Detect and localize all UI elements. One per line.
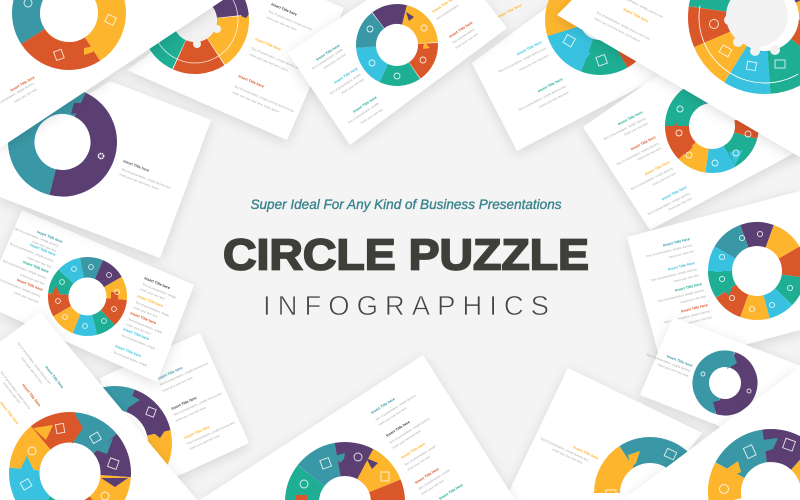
slide text: insert your own text — [454, 32, 478, 50]
slide text: Insert Title here — [681, 303, 708, 314]
slide text: Text of presentation, simple dummy text — [518, 84, 567, 112]
slide text: insert your own text here — [552, 447, 583, 465]
slide text: Insert Title here — [238, 74, 264, 89]
slide text: Text of presentation, simple — [142, 282, 177, 300]
slide text: Insert Title here — [623, 7, 649, 23]
slide text: Insert Title here — [184, 425, 210, 440]
slide text: Text of presentation, simple dummy — [630, 166, 674, 191]
slide text: Text of presentation, simple dummy — [603, 116, 647, 141]
panel: bottom two-part slide — [505, 368, 709, 500]
slide text: insert your own text here, lorem — [119, 172, 160, 191]
slide text: insert your own text here — [377, 406, 408, 427]
slide text: Insert Title here — [21, 383, 41, 407]
puzzle donut — [354, 2, 440, 88]
slide text: Insert Title here — [171, 396, 197, 411]
slide text: Text of presentation, simple dummy text — [251, 46, 301, 71]
slide text: insert your own text here — [657, 362, 689, 378]
slide text: Insert Title here — [385, 420, 411, 438]
slide text: insert your own text — [2, 381, 21, 404]
slide text: insert your own text — [680, 294, 706, 304]
title: CIRCLE PUZZLE: CIRCLE PUZZLE — [223, 230, 589, 280]
slide text: Insert Title here — [44, 365, 64, 389]
panel: top center slide — [472, 0, 720, 151]
slide text: Text of presentation, simple — [121, 333, 156, 351]
panel: right two-part slide — [640, 317, 800, 460]
slide text: Insert Title here — [370, 397, 396, 415]
slide text: insert your own text — [14, 290, 39, 304]
panel: top right large slide — [557, 0, 800, 157]
slide text: insert your own text — [126, 322, 151, 336]
puzzle donut — [549, 0, 651, 71]
slide text: Text of presentation, simple dummy — [14, 227, 60, 248]
slide text: Text of presentation, simple dummy text — [16, 341, 52, 385]
slide text: Insert Title here — [663, 237, 690, 248]
panel: top-left slide — [0, 0, 223, 148]
slide text: Insert Title here — [516, 40, 542, 56]
slide text: Text of presentation, simple dummy text — [173, 391, 223, 417]
panel: left purple donut slide — [0, 81, 211, 258]
slide text: Text of presentation, simple dummy text from the — [234, 84, 295, 113]
slide text: insert your own text here — [175, 406, 207, 423]
slide text: Insert Title here — [352, 95, 378, 114]
slide text: Text of presentation — [451, 27, 476, 45]
slide text — [370, 393, 464, 500]
slide text: Text of presentation, simple — [128, 317, 163, 335]
slide text: insert your own text — [668, 249, 694, 259]
title: INFOGRAPHICS: INFOGRAPHICS — [263, 290, 549, 321]
slide text: Text of presentation, simple dummy — [663, 309, 711, 324]
slide text: Insert Title here — [668, 261, 695, 272]
slide text: insert your own text — [667, 196, 693, 212]
multi-ring puzzle donut — [142, 0, 249, 73]
slide text: insert your own text here — [162, 376, 194, 393]
slide text: Insert Title here — [36, 230, 63, 244]
two-part donut — [694, 352, 756, 414]
slide text: Text of presentation, simple — [403, 444, 437, 467]
puzzle donut — [705, 219, 800, 323]
puzzle donut — [285, 442, 405, 500]
slide text: Text of presentation, simple dummy — [9, 242, 55, 263]
slide text: insert your own text here — [20, 356, 44, 385]
slide text — [0, 341, 64, 425]
two-part donut — [8, 87, 117, 197]
slide text: Insert Title here — [661, 185, 687, 201]
panel: bottom right slide — [623, 367, 800, 500]
slide text: insert your own text here — [391, 429, 422, 450]
slide text: insert your own text — [140, 287, 165, 301]
slide text: Text of presentation, simple dummy — [616, 141, 660, 166]
slide text: Insert Title here — [123, 327, 150, 341]
panel: right ten-part slide — [627, 191, 800, 367]
panel: bottom center slide — [200, 355, 515, 500]
panel: top multi-ring slide — [127, 0, 344, 140]
slide text: Text of presentation, simple dummy — [2, 259, 48, 280]
slide text — [0, 227, 177, 368]
slide text: Insert Title here — [29, 243, 56, 257]
slide text: insert your own text — [420, 479, 445, 496]
panel: left ten-part slide — [0, 210, 194, 382]
slide text: Text of presentation — [435, 3, 460, 21]
slide text: insert your own text here — [518, 53, 550, 72]
puzzle donut — [46, 255, 129, 338]
slide text: Insert Title here — [414, 467, 440, 485]
slide text — [232, 2, 313, 114]
slide text: insert your own text — [406, 455, 431, 472]
slide text: Text of presentation, simple dummy text — [540, 436, 589, 462]
slide text: insert your own text — [133, 305, 158, 319]
slide text: Insert Title here — [617, 110, 643, 126]
slide text: insert your own text here, lorem ipsum — [594, 16, 641, 43]
slide text: insert your own text here, lorem — [249, 52, 289, 73]
slide text — [603, 110, 693, 216]
slide text: Text of presentation, simple — [113, 350, 148, 368]
slide text: Text of presentation, simple dummy — [0, 370, 32, 410]
slide text: Insert Title here — [10, 75, 36, 93]
slide text: insert your own text — [27, 255, 52, 269]
panel: top six-part slide — [288, 0, 507, 145]
slide text: Text of presentation, simple dummy — [647, 191, 691, 216]
subtitle: Super Ideal For Any Kind of Business Presentations — [250, 196, 562, 212]
slide text: Insert Title here — [123, 159, 150, 173]
slide text: Insert Title here — [315, 43, 341, 62]
slide text: insert your own text here — [189, 434, 221, 451]
slide text: Text of presentation, simple — [329, 72, 362, 96]
slide text: insert your own text — [623, 121, 649, 137]
slide text — [157, 361, 236, 451]
slide text: Insert Title here — [255, 37, 281, 52]
slide text: insert your own text — [323, 52, 347, 70]
puzzle donut — [705, 426, 800, 500]
slide text: Insert Title here — [675, 282, 702, 293]
slide text: Text of presentation, simple dummy — [374, 393, 417, 422]
slide text: Insert Title here — [400, 442, 426, 460]
slide text: Text of presentation, simple dummy — [388, 416, 431, 445]
slide text: insert your own text here — [266, 15, 298, 32]
slide text: insert your own text — [341, 77, 365, 95]
slide text: Text of presentation, simple — [135, 300, 170, 318]
slide text: Insert Title here — [333, 66, 359, 85]
slide text: Insert Title here — [130, 311, 157, 325]
slide text: Text of presentation, simple dummy text — [498, 46, 547, 74]
slide text: Insert Title here — [22, 260, 49, 274]
slide text: Insert Title here — [157, 366, 183, 381]
slide text: Text of presentation, simple dummy — [645, 243, 693, 258]
slide text: insert your own text — [673, 273, 699, 283]
slide text — [594, 0, 664, 43]
slide text: Text of presentation, simple — [417, 468, 451, 491]
panel: right seven-part slide — [583, 50, 800, 230]
slide text: Text of presentation, simple dummy text — [186, 420, 236, 446]
slide text: Text of presentation, simple — [311, 47, 344, 71]
slide text: insert your own text — [636, 146, 662, 162]
puzzle donut — [6, 409, 134, 500]
slide text: Insert Title here — [537, 77, 563, 93]
slide text: Text of presentation, simple dummy text — [121, 167, 172, 190]
slide text: Insert Title here — [115, 344, 142, 358]
slide text: insert your own text — [686, 315, 712, 325]
slide text: insert your own text — [651, 171, 677, 187]
two-part donut — [591, 434, 709, 500]
slide text: Insert Title here — [573, 445, 599, 460]
slide text: Insert Title here — [644, 160, 670, 176]
slide text — [311, 0, 478, 125]
slide text: insert your own text — [13, 87, 38, 104]
slide text — [496, 3, 570, 112]
slide text: Insert Title here — [448, 21, 474, 39]
slide text: insert your own text — [360, 107, 384, 125]
large multi-ring donut — [675, 0, 800, 107]
slide text — [645, 237, 712, 325]
slide text: Insert Title here — [271, 2, 297, 17]
slide text: insert your own text — [20, 272, 45, 286]
slide text: Text of presentation, simple dummy — [646, 352, 692, 373]
slide text: Text of presentation, simple dummy — [268, 9, 313, 32]
puzzle donut — [52, 380, 178, 500]
slide text: Text of presentation, simple dummy text — [159, 361, 209, 387]
slide text: Insert Title here — [666, 354, 693, 368]
slide text: Insert Title here — [496, 3, 522, 19]
panel: lower-left three-part slide — [52, 333, 249, 500]
slide text: Text of presentation, simple dummy — [657, 288, 705, 303]
slide text: Text of presentation, simple dummy text from — [596, 10, 651, 41]
slide text: Text of presentation, simple — [347, 101, 380, 125]
panel: bottom-left large slide — [0, 312, 197, 500]
slide text: Text of presentation, simple dummy — [650, 267, 698, 282]
puzzle donut — [663, 77, 761, 175]
slide text: insert your own text — [32, 239, 57, 253]
slide text: Insert Title here — [137, 294, 164, 308]
slide text: Insert Title here — [16, 278, 43, 292]
slide text: insert your own text here — [538, 90, 570, 109]
puzzle donut — [10, 0, 128, 72]
slide text: Insert Title here — [630, 135, 656, 151]
slide text: insert your own text here, lorem ipsum — [232, 90, 280, 114]
slide text — [119, 159, 172, 191]
slide text: Insert Title here — [144, 276, 171, 290]
